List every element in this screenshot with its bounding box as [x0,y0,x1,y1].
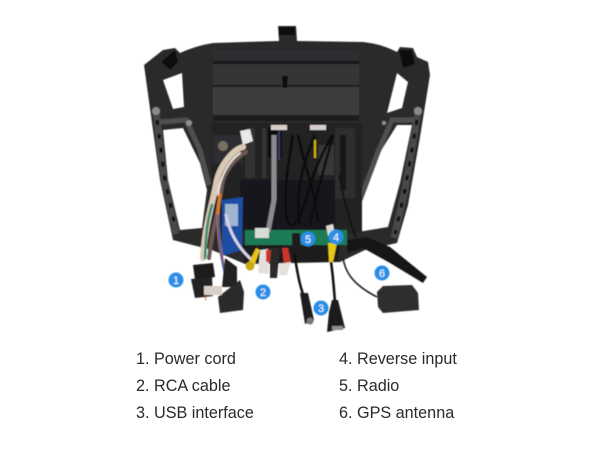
number badge 1: 1 [173,275,179,287]
GPS antenna [377,285,419,313]
USB cable left [292,233,314,324]
head unit photo [144,26,430,332]
RCA connectors [246,228,291,278]
number badge 2: 2 [260,287,266,299]
lower dark housing [240,245,340,262]
white connector [240,129,253,145]
number badge 4: 4 [333,232,339,244]
GPS cable coil [339,175,427,297]
legend right column: 5. Radio [339,377,399,395]
number badge 1 [168,272,184,288]
power plugs [191,258,244,313]
number badge 4 [328,230,344,244]
USB cable right with yellow RCA [326,224,345,332]
legend left column [136,350,254,422]
number badge 5 [300,232,316,246]
frame bezel [144,26,430,264]
green circuit board [245,230,347,245]
legend right column [339,350,457,422]
legend left column: 1. Power cord [136,350,236,368]
number badge 6: 6 [379,268,385,280]
legend left column: 3. USB interface [136,404,254,422]
wiring loom power cord [203,147,254,300]
upper recessed panel [203,48,370,121]
blue interface box [222,197,243,256]
center wires [268,125,333,232]
number badge 6 [374,266,390,280]
number badge 3 [314,300,328,316]
lower module area [212,123,362,233]
legend left column: 2. RCA cable [136,377,230,395]
number badge 5: 5 [305,234,311,246]
legend right column: 6. GPS antenna [339,404,454,422]
number badge 2 [256,284,270,300]
legend right column: 4. Reverse input [339,350,457,368]
number badge 3: 3 [318,303,324,315]
